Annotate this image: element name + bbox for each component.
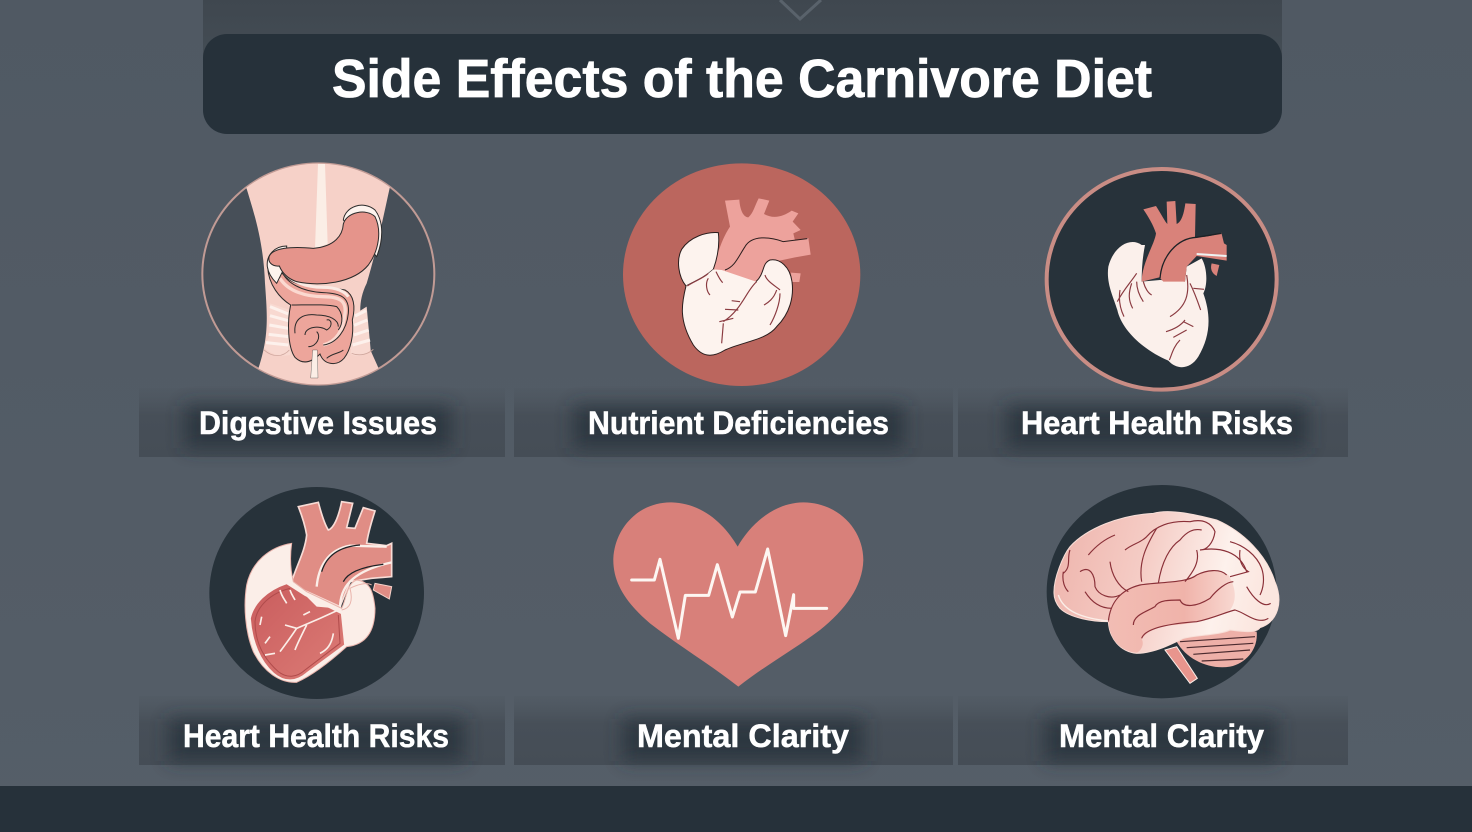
stomach [343, 205, 382, 257]
icon: header chevron [780, 0, 821, 19]
intestine [268, 267, 354, 364]
panel: mental clarity (brain) [958, 485, 1348, 765]
label bar [139, 388, 505, 457]
icon: digestive system [202, 153, 434, 393]
title: Side Effects of the Carnivore Diet [332, 49, 1152, 109]
icon: heart with pulse line [613, 502, 863, 687]
label bar [514, 388, 953, 457]
icon: brain [1047, 485, 1279, 698]
icon: anatomical heart [209, 487, 424, 699]
label text: Heart Health Risks [1021, 405, 1293, 441]
label text: Digestive Issues [199, 405, 437, 441]
panel: heart health risks (bottom) [139, 487, 505, 765]
label text: Mental Clarity [1059, 718, 1264, 754]
label text: Heart Health Risks [183, 718, 449, 754]
icon: heart on dark circle [1047, 169, 1277, 390]
top header tab [203, 0, 1282, 60]
icon: heart on red circle [623, 163, 860, 386]
panel: heart health risks (top) [958, 169, 1348, 457]
label bar [958, 696, 1348, 765]
bottom band [0, 786, 1472, 832]
panel: digestive issues [139, 153, 505, 457]
ribs [264, 303, 373, 356]
label bar [139, 696, 505, 765]
panel: mental clarity (heart rate) [514, 502, 953, 765]
label bar [514, 696, 953, 765]
panel: nutrient deficiencies [514, 163, 953, 457]
title banner [203, 34, 1282, 134]
label text: Mental Clarity [637, 718, 849, 754]
label text: Nutrient Deficiencies [588, 405, 889, 441]
label bar [958, 388, 1348, 457]
